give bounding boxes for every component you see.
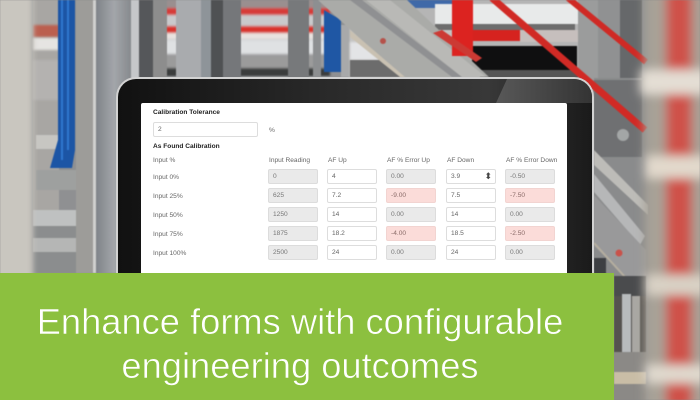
row: input 100%: 24: [332, 249, 339, 256]
row: input 50%: [153, 207, 555, 222]
row: input 50%: 0.00: [510, 211, 523, 218]
red column: [452, 0, 473, 56]
row: input 25%: [153, 188, 555, 203]
right mid machinery: [594, 78, 648, 400]
row: input 100%: 24: [451, 249, 458, 256]
row: input 75%: 18.5: [451, 230, 464, 237]
row: input 0%: -0.50: [510, 173, 525, 180]
steel columns: [76, 0, 93, 273]
foreground blur: right column with red stripe: [640, 0, 700, 400]
row: input 50%: 14: [451, 211, 458, 218]
row: input 100%: 0.00: [510, 249, 523, 256]
heading: as found calibration: As Found Calibration: [153, 143, 220, 150]
row: input 0%: Input 0%: [153, 174, 179, 181]
row: input 0%: 0.00: [391, 173, 404, 180]
row: input 75%: -4.00: [391, 230, 406, 237]
title: engineering outcomes: [121, 345, 479, 386]
row: input 75%: 1875: [273, 230, 288, 237]
row: input 75%: 18.2: [332, 230, 345, 237]
column headers: Input Reading: [269, 157, 310, 164]
row: input 100%: Input 100%: [153, 250, 186, 257]
steel posts: [578, 0, 598, 80]
row: input 0%: [153, 169, 555, 184]
row: input 75%: Input 75%: [153, 231, 183, 238]
foreground blur: left: [0, 0, 33, 400]
row: input 25%: 7.5: [451, 192, 460, 199]
bezel gloss highlight: [496, 79, 594, 103]
tablet bezel: [116, 77, 594, 287]
column headers: AF Up: [328, 157, 347, 164]
row: input 75%: [153, 226, 555, 241]
row: input 50%: 1250: [273, 211, 288, 218]
row: input 0%: 0: [273, 173, 277, 180]
percent unit: %: [269, 127, 275, 134]
row: input 100%: 0.00: [391, 249, 404, 256]
tolerance input: 2: [158, 126, 162, 133]
column headers: Input %: [153, 157, 175, 164]
row: input 0%: 3.9: [451, 173, 460, 180]
blue cables: [50, 0, 75, 168]
row: input 25%: -9.00: [391, 192, 406, 199]
row: input 0%: ⬍: [484, 171, 492, 181]
tablet screen: calibration form: [141, 103, 567, 275]
row: input 50%: 14: [332, 211, 339, 218]
row: input 25%: 625: [273, 192, 284, 199]
title: [37, 301, 563, 386]
row: input 100%: [153, 245, 555, 260]
right background: [318, 0, 642, 80]
far background: red and white pipes: [160, 0, 330, 80]
column headers: AF % Error Up: [387, 157, 430, 164]
row: input 100%: 2500: [273, 249, 288, 256]
row: input 50%: 0.00: [391, 211, 404, 218]
heading: calibration tolerance: Calibration Tolerance: [153, 109, 220, 116]
tolerance input: [153, 122, 258, 137]
column headers: AF % Error Down: [506, 157, 557, 164]
title: Enhance forms with configurable: [37, 301, 563, 342]
column headers: AF Down: [447, 157, 474, 164]
row: input 25%: 7.2: [332, 192, 341, 199]
grey diagonal beam: [318, 0, 489, 77]
green title band: [0, 273, 614, 400]
column headers: [153, 157, 557, 164]
red diagonal rails: [492, 0, 646, 130]
row: input 0%: 4: [332, 173, 336, 180]
row: input 25%: -7.50: [510, 192, 525, 199]
row: input 50%: Input 50%: [153, 212, 183, 219]
row: input 75%: -2.50: [510, 230, 525, 237]
left foreground blur and mid pipes: [33, 0, 349, 273]
row: input 25%: Input 25%: [153, 193, 183, 200]
